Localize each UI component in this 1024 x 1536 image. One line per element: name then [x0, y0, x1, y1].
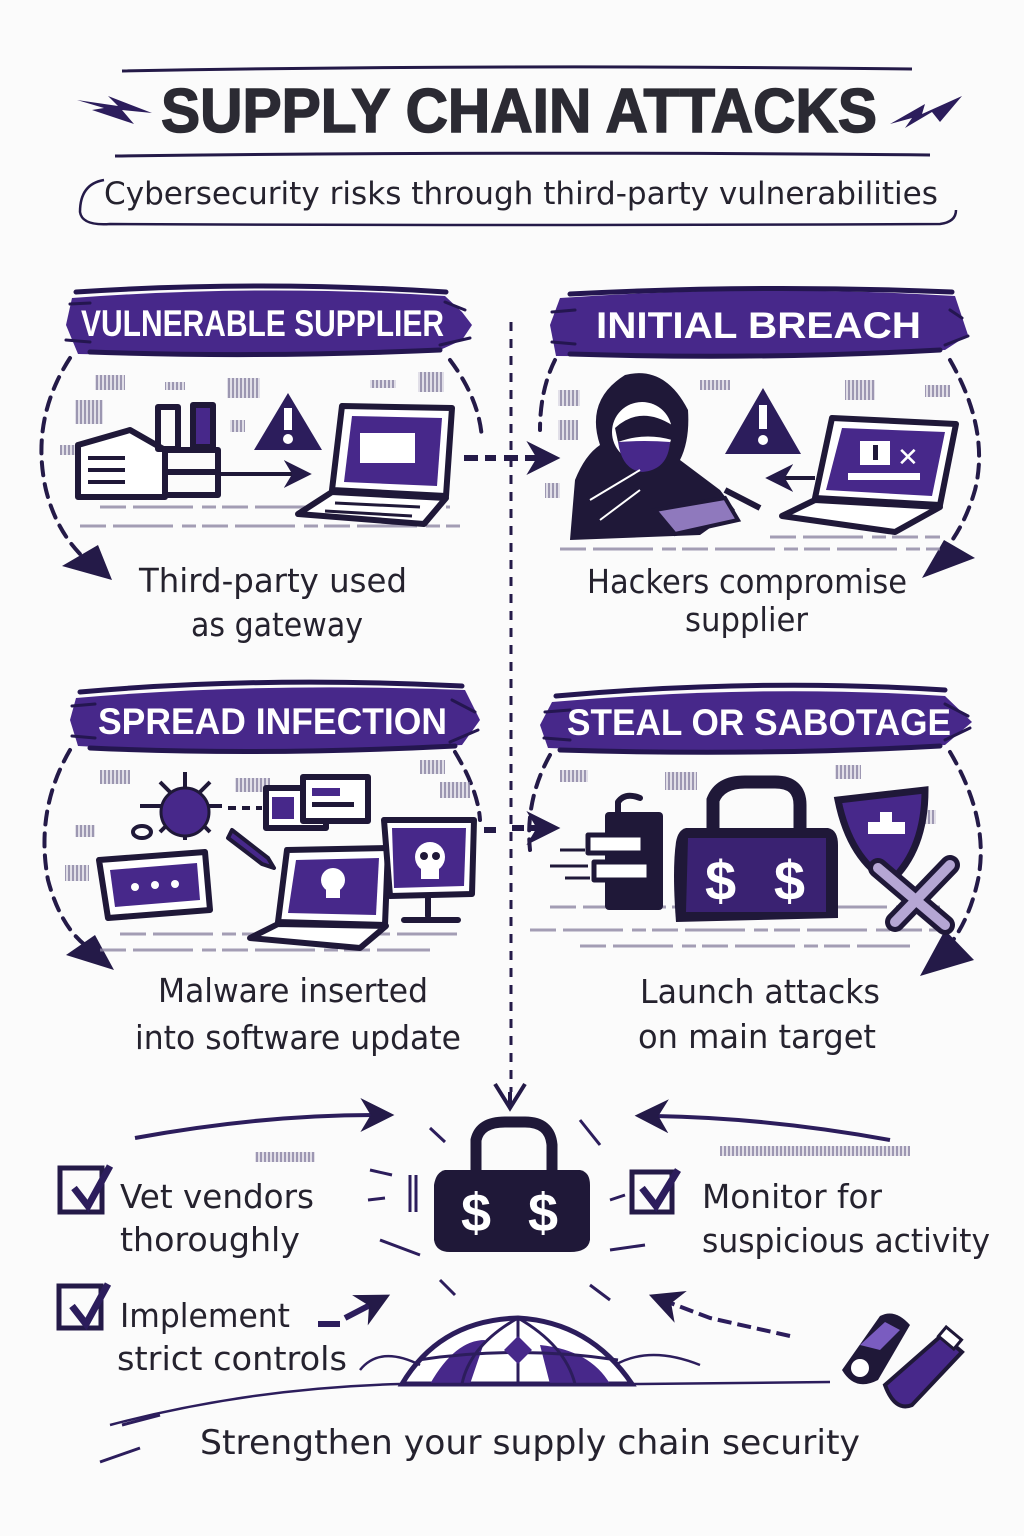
background scribbles — [560, 765, 936, 824]
panel: initial breach: supplier — [685, 600, 808, 639]
heading: vulnerable supplier: VULNERABLE SUPPLIER — [81, 303, 444, 344]
icon: padlock server — [550, 796, 663, 910]
background scribbles — [65, 760, 470, 881]
heading: spread infection — [70, 682, 480, 752]
checklist: vet vendors — [60, 1166, 314, 1259]
icon: warning triangle — [254, 393, 322, 450]
panel: spread infection: into software update — [135, 1018, 461, 1057]
title block — [115, 67, 930, 156]
arrow — [218, 472, 295, 476]
arrow — [782, 476, 815, 480]
dashed arrows — [41, 358, 482, 580]
text: Launch attacks — [640, 972, 880, 1011]
panel: spread infection — [44, 682, 480, 1057]
checklist: vet vendors: Vet vendors — [120, 1177, 314, 1216]
brush strokes — [100, 1415, 160, 1462]
checklist: monitor — [632, 1170, 990, 1260]
dashed arrows — [44, 750, 480, 970]
icon: money bag padlock: $ $ — [705, 849, 805, 912]
arrow: centre down — [495, 1084, 525, 1108]
title: SUPPLY CHAIN ATTACKS — [161, 77, 877, 146]
icon: right lightning — [890, 96, 962, 128]
checklist: vet vendors: thoroughly — [120, 1220, 300, 1259]
text: Malware inserted — [158, 971, 428, 1010]
panel: steal or sabotage — [529, 685, 981, 1056]
background scribbles — [60, 372, 444, 455]
checklist: monitor: suspicious activity — [702, 1221, 990, 1260]
checklist: implement — [59, 1284, 347, 1378]
panel: vulnerable supplier — [41, 286, 482, 644]
icon: shield and crossbones — [838, 790, 950, 925]
arrow: step 3 to 4 — [484, 828, 540, 830]
arrow: lower right — [668, 1302, 790, 1336]
icon: pen — [228, 830, 274, 868]
panel: vulnerable supplier: as gateway — [191, 605, 363, 644]
panel: initial breach — [540, 288, 979, 639]
icon: monitor with skull — [384, 820, 474, 920]
text: Hackers compromise — [587, 562, 907, 601]
arrow: lower left — [318, 1304, 372, 1324]
checklist: implement: strict controls — [117, 1339, 347, 1378]
icon: hooded hacker — [570, 373, 760, 540]
divider: central dashed line — [510, 322, 512, 1092]
heading: spread infection: SPREAD INFECTION — [98, 701, 447, 742]
heading: steal or sabotage — [540, 685, 972, 752]
icon: left lightning — [77, 96, 152, 124]
heading: steal or sabotage: STEAL OR SABOTAGE — [567, 702, 951, 743]
checklist: implement: Implement — [120, 1296, 290, 1335]
subtitle — [80, 176, 956, 225]
heading: initial breach: INITIAL BREACH — [596, 305, 921, 346]
icon: windows — [228, 777, 368, 828]
arrow: top left — [135, 1115, 374, 1138]
icon: monitor left — [99, 852, 210, 918]
icon: usb drives — [842, 1313, 962, 1406]
icon: money bag padlock — [674, 782, 838, 922]
icon: laptop with skull — [250, 848, 388, 948]
icon: central money padlock: $ $ — [461, 1183, 558, 1243]
heading: initial breach — [550, 288, 968, 356]
subtitle: Cybersecurity risks through third-party vulnerabilities — [104, 176, 938, 212]
arrow: top right — [655, 1116, 890, 1140]
text: Third-party used — [138, 561, 407, 600]
icon: laptop — [298, 406, 452, 524]
heading: vulnerable supplier — [66, 286, 472, 355]
icon: warning triangle — [725, 388, 801, 454]
icon: virus — [133, 772, 222, 840]
scribbles around the lock — [368, 1120, 645, 1300]
arrow: step 1 to 2 — [464, 455, 540, 461]
panel: defences — [59, 1084, 990, 1463]
icon: laptop with tools — [782, 418, 956, 532]
icon: central money padlock — [434, 1122, 590, 1252]
checklist: monitor: Monitor for — [702, 1177, 882, 1216]
dashed arrows — [529, 752, 981, 976]
icon: globe — [110, 1318, 830, 1425]
panel: steal or sabotage: on main target — [638, 1017, 876, 1056]
icon: laptop with tools: ✕ — [897, 443, 919, 473]
dashed arrows — [540, 360, 979, 578]
icon: factory — [78, 405, 218, 497]
closing line: Strengthen your supply chain security — [200, 1423, 860, 1463]
background scribbles — [545, 380, 950, 498]
